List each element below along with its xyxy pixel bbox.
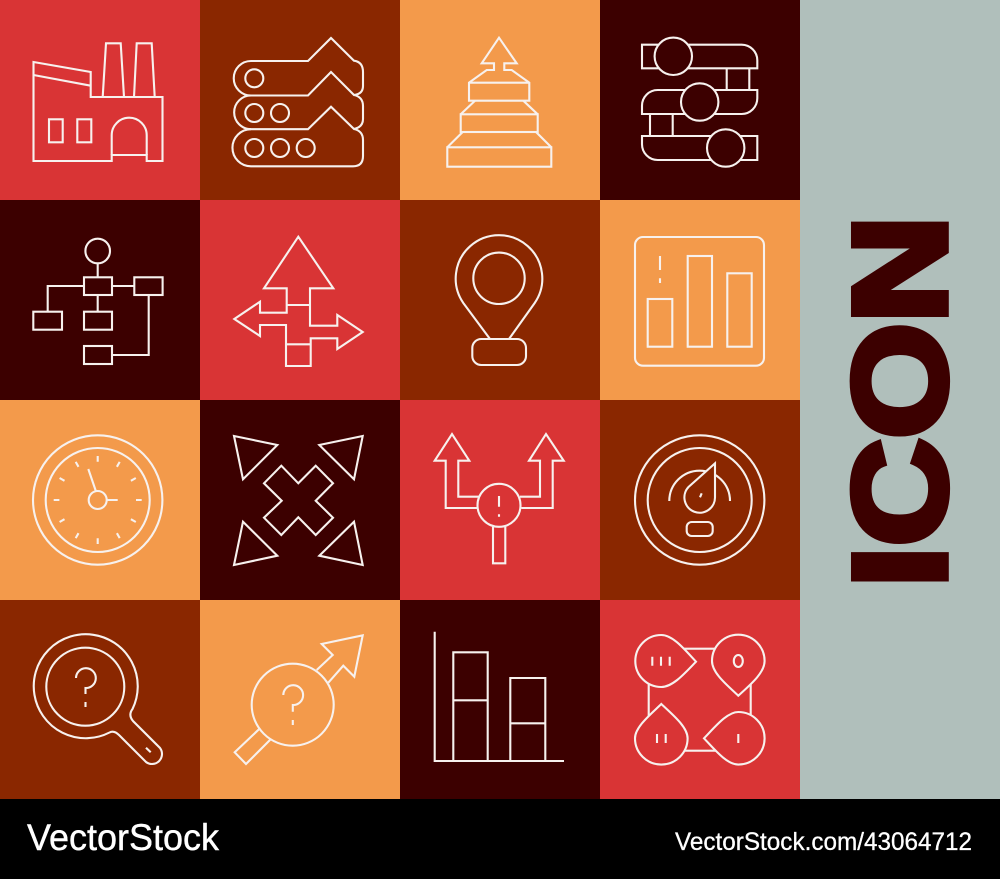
panel: bar chart card [600, 200, 800, 400]
icon: diagonal arrow with question mark [235, 635, 363, 764]
icon: bar chart with alert [635, 237, 764, 366]
panel: four-step pins [600, 600, 800, 799]
icon: speedometer [635, 435, 764, 565]
icon: sliders [642, 38, 757, 167]
icon: factory [34, 43, 162, 161]
panel: location pin [400, 200, 600, 400]
panel: clock [0, 400, 200, 600]
panel: multi-direction arrows [200, 200, 400, 400]
panel: magnifier [0, 600, 200, 799]
footer brand: VectorStock [27, 817, 219, 858]
panel: sliders [600, 0, 800, 200]
icon: cross with four arrows [234, 436, 363, 565]
panel: arrow with question [200, 600, 400, 799]
footer bar [0, 799, 1000, 879]
panel: server arrows [200, 0, 400, 200]
sidebar panel [800, 0, 1000, 799]
panel: factory [0, 0, 200, 200]
icon: split arrows with alert [435, 434, 564, 563]
icon: four drops on a square [635, 635, 765, 765]
panel: pyramid [400, 0, 600, 200]
icon: magnifier with question mark [34, 634, 162, 764]
title: ICON: ICON [826, 216, 973, 588]
icon: clock [33, 435, 162, 565]
panel: gauge [600, 400, 800, 600]
icon: stacked rows with up arrows [232, 38, 363, 166]
icon: pyramid with arrow [447, 38, 551, 167]
footer image id: VectorStock.com/43064712 [675, 828, 972, 856]
icon: flowchart [33, 239, 163, 364]
icon: location pin [456, 235, 542, 365]
panel: flowchart [0, 200, 200, 400]
panel: expand arrows [200, 400, 400, 600]
icon: three-way arrow [234, 237, 363, 366]
icon: stacked bar chart [435, 632, 564, 761]
panel: stacked bars [400, 600, 600, 799]
panel: split decision [400, 400, 600, 600]
